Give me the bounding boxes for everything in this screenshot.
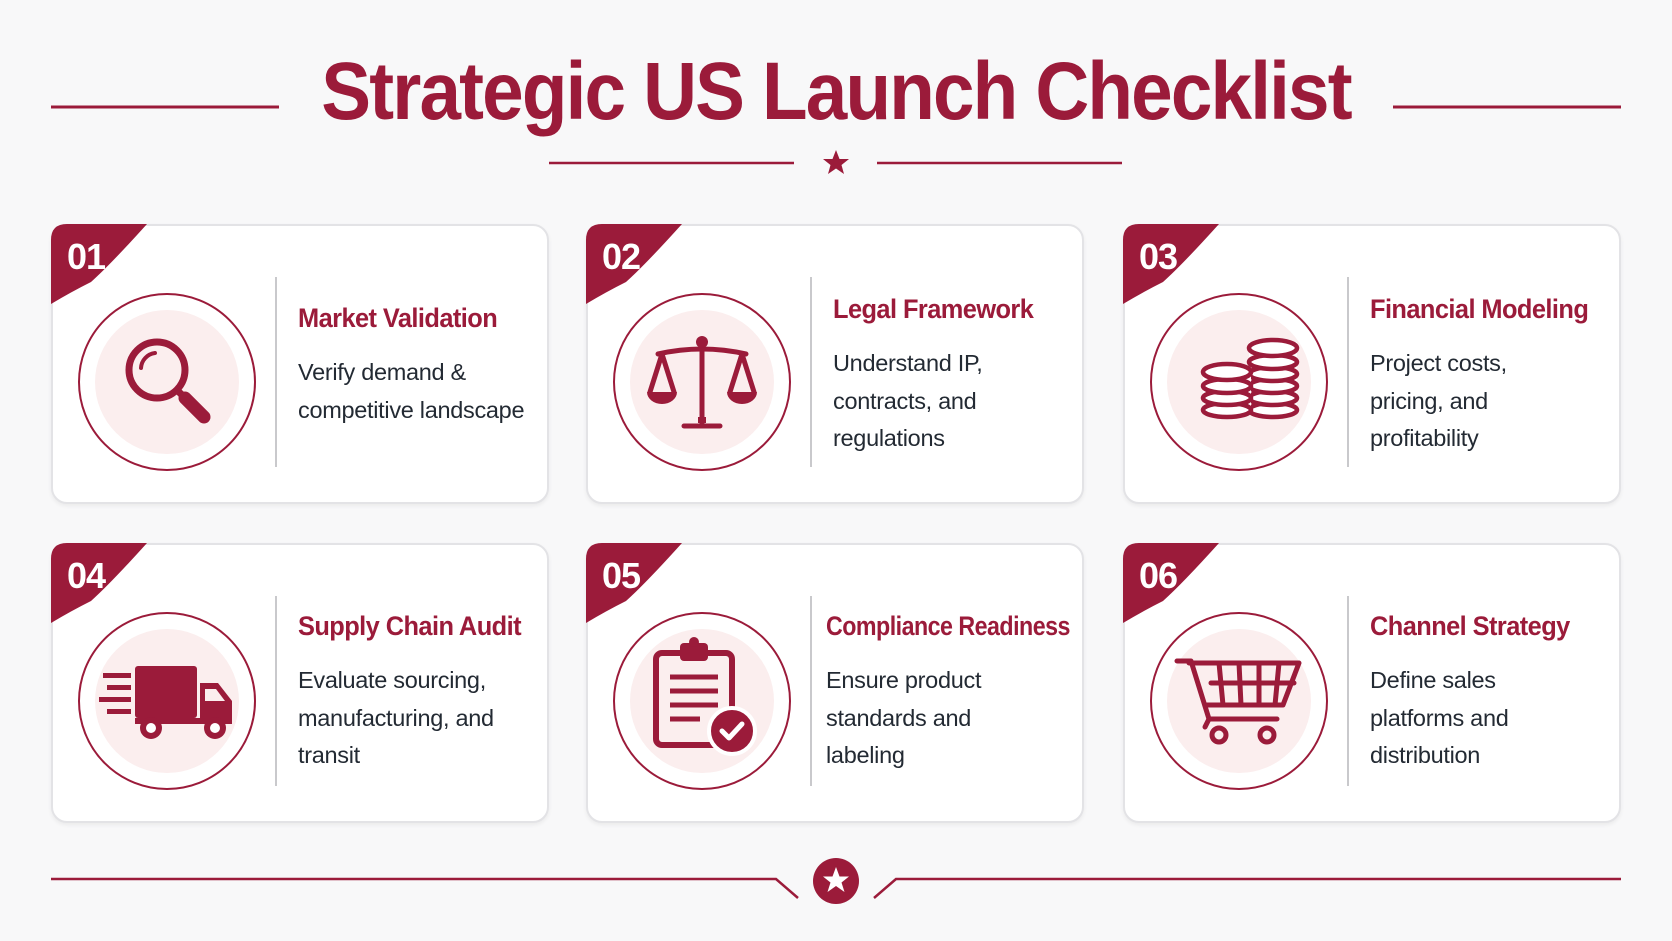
- card 06: platforms and: [1370, 704, 1508, 730]
- card 01: 01: [67, 236, 105, 277]
- icon: cart: [1150, 612, 1328, 790]
- icon: coins: [1150, 293, 1328, 471]
- card 04: transit: [298, 742, 360, 768]
- card 02: Understand IP,: [833, 350, 983, 376]
- card 05: 05: [602, 555, 640, 596]
- card 01: Market Validation: [298, 303, 497, 333]
- card 05: standards and: [826, 704, 971, 730]
- card 03: 03: [1139, 236, 1177, 277]
- icon: magnifier: [78, 293, 256, 471]
- card 01: Verify demand &: [298, 359, 466, 385]
- card 06: Channel Strategy: [1370, 611, 1570, 641]
- card 05: Compliance Readiness: [826, 611, 1070, 641]
- card 01: competitive landscape: [298, 396, 524, 422]
- card 03: Financial Modeling: [1370, 294, 1588, 324]
- card 03: pricing, and: [1370, 388, 1488, 414]
- card 02: 02: [602, 236, 640, 277]
- card 05: labeling: [826, 742, 905, 768]
- card 03: Project costs,: [1370, 350, 1507, 376]
- card 03: profitability: [1370, 425, 1478, 451]
- card 03: [1123, 224, 1621, 504]
- card 02: contracts, and: [833, 388, 976, 414]
- title decorative lines and star: [51, 106, 1621, 174]
- card 02: Legal Framework: [833, 294, 1033, 324]
- card 06: distribution: [1370, 742, 1480, 768]
- card 02: regulations: [833, 425, 945, 451]
- card 04: manufacturing, and: [298, 704, 494, 730]
- card 05: Ensure product: [826, 667, 981, 693]
- card 06: 06: [1139, 555, 1177, 596]
- icon: clipboard check: [613, 612, 791, 790]
- icon: truck: [78, 612, 256, 790]
- footer divider with star: [51, 858, 1621, 904]
- icon: scales: [613, 293, 791, 471]
- card 04: 04: [67, 555, 105, 596]
- card 02: [586, 224, 1084, 504]
- card 01: [51, 224, 549, 504]
- card 06: [1123, 543, 1621, 823]
- title: Strategic US Launch Checklist: [321, 46, 1351, 137]
- card 04: [51, 543, 549, 823]
- card 04: Evaluate sourcing,: [298, 667, 486, 693]
- card 04: Supply Chain Audit: [298, 611, 521, 641]
- card 06: Define sales: [1370, 667, 1496, 693]
- card 05: [586, 543, 1084, 823]
